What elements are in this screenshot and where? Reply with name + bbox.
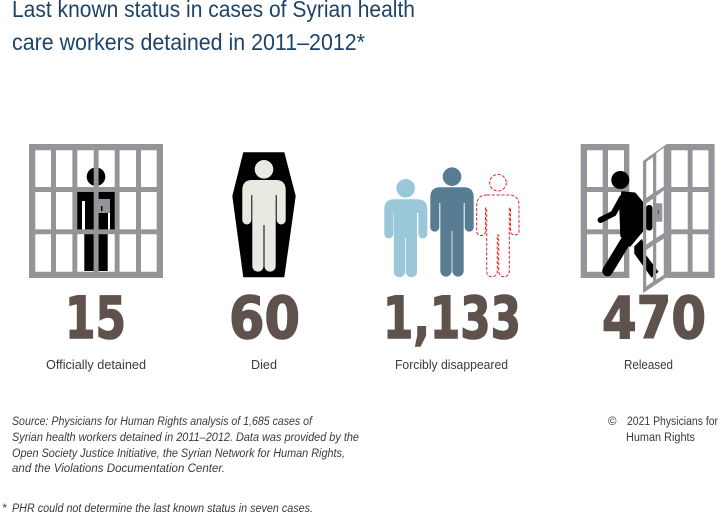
copyright: ©: [608, 416, 617, 428]
icon: three figures, one missing: [384, 167, 519, 277]
label: died: Died: [251, 357, 277, 372]
footnote: PHR could not determine the last known status in seven cases.: [12, 503, 313, 515]
number: released: 470: [602, 284, 706, 352]
number: forcibly disappeared: 1,133: [383, 284, 521, 352]
source note: Source: Physicians for Human Rights analysis of 1,685 cases of: [12, 416, 314, 428]
icon: person behind bars: [29, 144, 163, 278]
copyright: Human Rights: [626, 432, 695, 444]
door lock: [655, 203, 662, 222]
source note: and the Violations Documentation Center.: [12, 463, 225, 475]
label: officially detained: Officially detained: [46, 357, 146, 372]
title: care workers detained in 2011–2012*: [12, 29, 365, 55]
figure: dark blue: [430, 167, 474, 277]
right cell bars: [667, 144, 714, 278]
footnote: *: [2, 503, 7, 515]
source note: Open Society Justice Initiative, the Syrian Network for Human Rights,: [12, 448, 345, 460]
copyright: [608, 416, 718, 444]
number: officially detained: 15: [65, 284, 126, 352]
left cell bars: [581, 144, 629, 278]
icon: person walking out of open cell door: [581, 144, 714, 293]
open door: [643, 144, 667, 293]
icon: person in coffin: [232, 152, 296, 277]
number: died: 60: [229, 284, 300, 352]
walking figure: [600, 171, 658, 277]
figure: light blue: [384, 179, 427, 277]
label: released: Released: [624, 357, 673, 372]
source note: [12, 416, 359, 475]
title: [12, 0, 415, 55]
label: forcibly disappeared: Forcibly disappeared: [395, 357, 508, 372]
figure: red dashed outline: [477, 174, 519, 277]
source note: Syrian health workers detained in 2011–2012. Data was provided by the: [12, 432, 359, 444]
